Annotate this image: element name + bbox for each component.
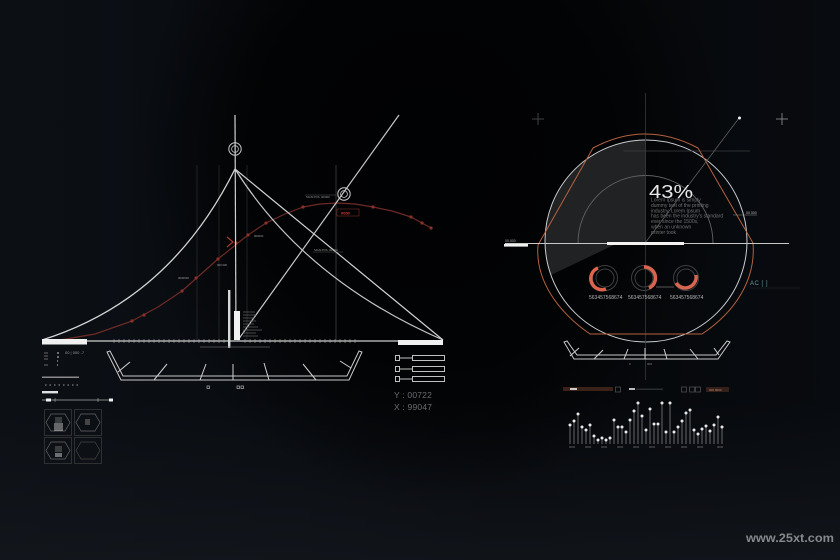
- base rule with ticks: [42, 339, 443, 343]
- coordinates: [394, 390, 432, 412]
- small labels: SIGN POS. 00/000: [314, 248, 338, 252]
- grey sector: [545, 140, 646, 275]
- pointer line: [645, 118, 739, 243]
- right scale ticks: [629, 362, 652, 366]
- right scale ticks: 0: [629, 362, 631, 366]
- lorem text block: ever since the 1500s,: [651, 219, 699, 225]
- coordinates: X : 99047: [394, 402, 432, 412]
- right cable curve: [235, 169, 443, 340]
- donut gauges: 563457568674: [670, 295, 704, 301]
- horizon rule: [504, 239, 789, 247]
- faint vertical guide lines: [197, 165, 336, 340]
- percentage: 43%: [649, 182, 693, 202]
- AC label: AC [ ]: [750, 281, 768, 287]
- lorem text block: when an unknown: [651, 224, 692, 230]
- data block beside pylon: [243, 312, 262, 336]
- left tray scale: [107, 351, 362, 388]
- lollipop chart: 0000: [569, 445, 576, 449]
- lorem text block: dummy text of the printing: [651, 203, 709, 209]
- white end bars: [42, 339, 443, 345]
- inner arc: [578, 176, 713, 243]
- left readout: [44, 350, 85, 365]
- coordinates: Y : 00722: [394, 390, 432, 400]
- lollipop chart: 0000: [585, 445, 592, 449]
- AC label: [750, 281, 800, 288]
- lollipop chart: 0000: [681, 445, 688, 449]
- lorem text block: printer took: [651, 230, 677, 236]
- watermark: www.25xt.com: [745, 531, 834, 545]
- lollipop chart: 0000: [697, 445, 704, 449]
- vertical mast: [235, 115, 236, 340]
- lollipop chart: 0000: [633, 445, 640, 449]
- lollipop chart: 0000: [617, 445, 624, 449]
- right tray scale: [564, 341, 730, 359]
- small labels: [178, 195, 343, 280]
- lorem text block: [651, 198, 723, 236]
- orange hull: [538, 134, 753, 334]
- right scale ticks: 000: [647, 362, 652, 366]
- small labels: 000000: [254, 234, 264, 238]
- corner crosses: [532, 113, 788, 125]
- diagonal line: [238, 115, 399, 340]
- left readout: 00 | 000 -7: [65, 350, 85, 355]
- target circle on mast: [229, 143, 241, 155]
- lollipop chart: 0000: [649, 445, 656, 449]
- lollipop chart: 0000: [665, 445, 672, 449]
- small labels: 0000000: [178, 276, 189, 280]
- donut gauges: [589, 266, 704, 301]
- pointer end dot: [738, 116, 741, 120]
- left sliders: [42, 376, 113, 402]
- target circle on diagonal: [338, 188, 350, 200]
- right diagram: radar dial: [504, 93, 800, 380]
- red tag: 0000: [341, 210, 351, 216]
- right straight cable: [235, 169, 443, 340]
- white pylon bar and gauge: [200, 290, 270, 348]
- donut gauges: 563457568674: [589, 295, 623, 301]
- lorem text block: has been the industry's standard: [651, 214, 723, 220]
- small labels: 000.000: [217, 263, 228, 267]
- crosshair lines: [623, 93, 750, 380]
- donut gauges: 563457568674: [628, 295, 662, 301]
- left diagram: suspension structure: [42, 115, 443, 348]
- lollipop chart: [568, 402, 724, 449]
- lorem text block: industry. Lorem Ipsum: [651, 208, 700, 214]
- red tag: [337, 209, 359, 216]
- small labels: SIGN POS. 00/000: [306, 195, 330, 199]
- hexagon icon grid: [44, 410, 102, 464]
- horizon rule: 00.000: [505, 239, 516, 243]
- lollipop chart: 0000: [601, 445, 608, 449]
- red trajectory curve: [60, 203, 433, 340]
- control strip: 000 0000: [709, 388, 722, 392]
- side tag: 00 000: [746, 211, 757, 215]
- left cable curve: [42, 169, 235, 340]
- lollipop chart: 0000: [717, 445, 724, 449]
- main circle: [545, 140, 747, 342]
- lorem text block: Lorem Ipsum is simply: [651, 198, 701, 204]
- control strip: [563, 387, 729, 392]
- right legend rows: [396, 356, 444, 382]
- side tag: [733, 211, 757, 215]
